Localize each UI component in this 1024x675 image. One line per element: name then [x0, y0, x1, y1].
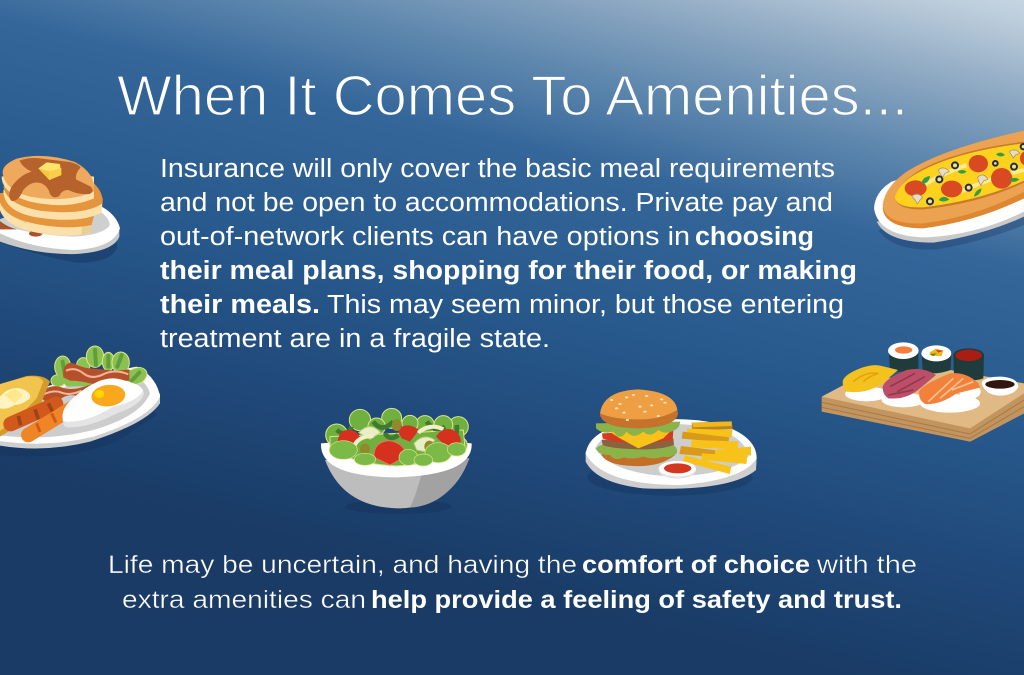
icon: pancakes on plate — [0, 156, 120, 263]
closing statement: extra amenities can — [122, 586, 366, 614]
body paragraph: and not be open to accommodations. Private pay and — [160, 189, 833, 217]
closing statement: Life may be uncertain, and having the — [108, 551, 577, 579]
body paragraph: their meal plans, shopping for their food, or making — [160, 257, 857, 285]
icon: pizza on plate — [874, 131, 1024, 250]
title: When It Comes To Amenities... — [117, 64, 908, 128]
icon: burger and fries on plate — [586, 389, 757, 496]
icon: sushi on wooden board — [822, 342, 1024, 442]
body paragraph — [160, 155, 857, 353]
body paragraph: their meals. — [160, 291, 320, 319]
icon: breakfast plate with egg and bacon — [0, 346, 160, 457]
body paragraph: out-of-network clients can have options in — [160, 223, 690, 251]
closing statement — [108, 551, 917, 614]
body paragraph: treatment are in a fragile state. — [160, 325, 550, 353]
body paragraph: choosing — [695, 223, 814, 251]
icon: salad bowl — [321, 408, 472, 514]
closing statement: comfort of choice — [582, 551, 810, 579]
closing statement: help provide a feeling of safety and trust. — [371, 586, 902, 614]
body paragraph: This may seem minor, but those entering — [327, 291, 844, 319]
body paragraph: Insurance will only cover the basic meal requirements — [160, 155, 835, 183]
closing statement: with the — [816, 551, 917, 579]
